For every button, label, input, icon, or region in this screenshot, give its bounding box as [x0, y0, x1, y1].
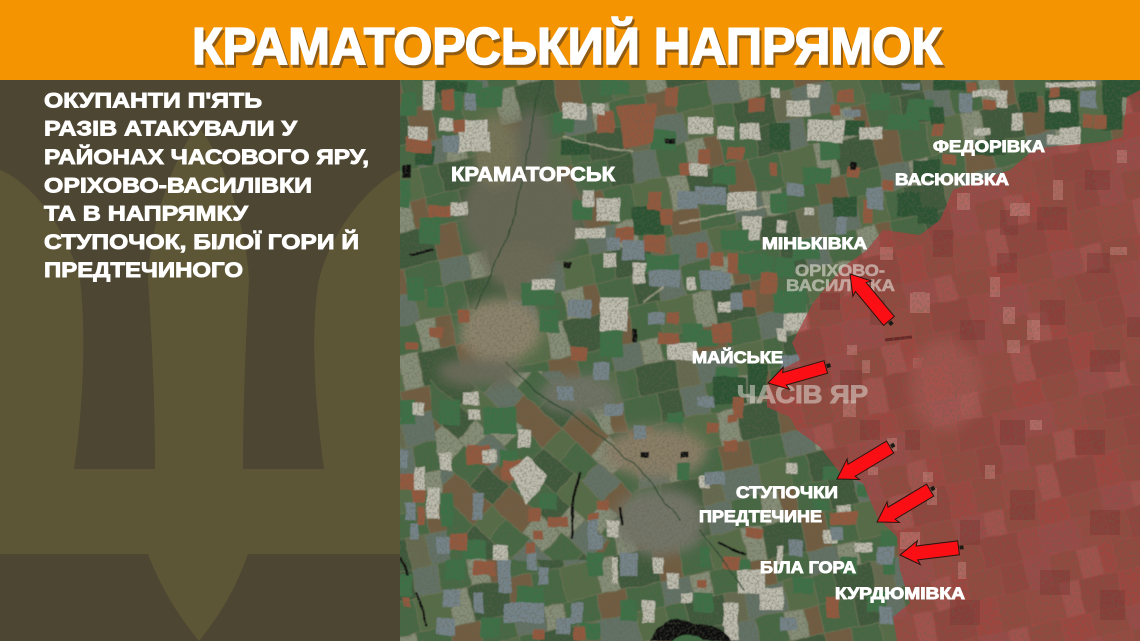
arrow: Bila Hora — [899, 535, 965, 567]
title: КРАМАТОРСЬКИЙ НАПРЯМОК — [192, 17, 942, 76]
arrow: Predtechyne — [871, 477, 941, 532]
text block: summary: СТУПОЧОК, БІЛОЇ ГОРИ Й — [44, 229, 359, 254]
text block: summary: РАЗІВ АТАКУВАЛИ У — [44, 117, 298, 141]
left panel — [0, 80, 400, 641]
label: Курдюмівка: КУРДЮМІВКА — [835, 585, 965, 603]
text block: summary: ОРІХОВО-ВАСИЛІВКИ — [44, 173, 312, 197]
arrow: Stupochky — [831, 434, 901, 489]
label: Орихово-Василівка: ВАСИЛІВКА — [786, 276, 895, 295]
label: Майське: МАЙСЬКЕ — [692, 348, 783, 367]
label: Орихово-Василівка — [786, 261, 895, 295]
arrow: Chasiv Yar — [765, 355, 834, 395]
label: Краматорськ: КРАМАТОРСЬК — [451, 163, 616, 186]
label: Міньківка: МІНЬКІВКА — [762, 235, 867, 253]
arrow: Orikhovo-Vasylivka — [841, 266, 901, 332]
map texture — [400, 80, 1140, 641]
satellite map — [390, 70, 1140, 641]
label: Предтечине: ПРЕДТЕЧИНЕ — [699, 508, 822, 526]
occupied territory overlay — [767, 90, 1140, 641]
label: Часів Яр: ЧАСІВ ЯР — [737, 381, 868, 409]
text block: summary: ОКУПАНТИ П'ЯТЬ — [44, 88, 262, 112]
label: Біла Гора: БІЛА ГОРА — [760, 559, 856, 577]
text block: summary: ТА В НАПРЯМКУ — [44, 202, 249, 226]
icon: trident emblem — [0, 125, 400, 641]
label: Федорівка: ФЕДОРІВКА — [933, 138, 1045, 156]
text block: summary — [44, 88, 369, 282]
title: КРАМАТОРСЬКИЙ НАПРЯМОК — [194, 20, 944, 79]
header band — [0, 0, 1140, 80]
label: Орихово-Василівка: ОРІХОВО- — [795, 261, 885, 280]
text block: summary: ПРЕДТЕЧИНОГО — [44, 258, 243, 282]
text block: summary: РАЙОНАХ ЧАСОВОГО ЯРУ, — [44, 144, 369, 169]
label: Ступочки: СТУПОЧКИ — [736, 484, 838, 502]
label: Васюківка: ВАСЮКІВКА — [895, 171, 1009, 189]
